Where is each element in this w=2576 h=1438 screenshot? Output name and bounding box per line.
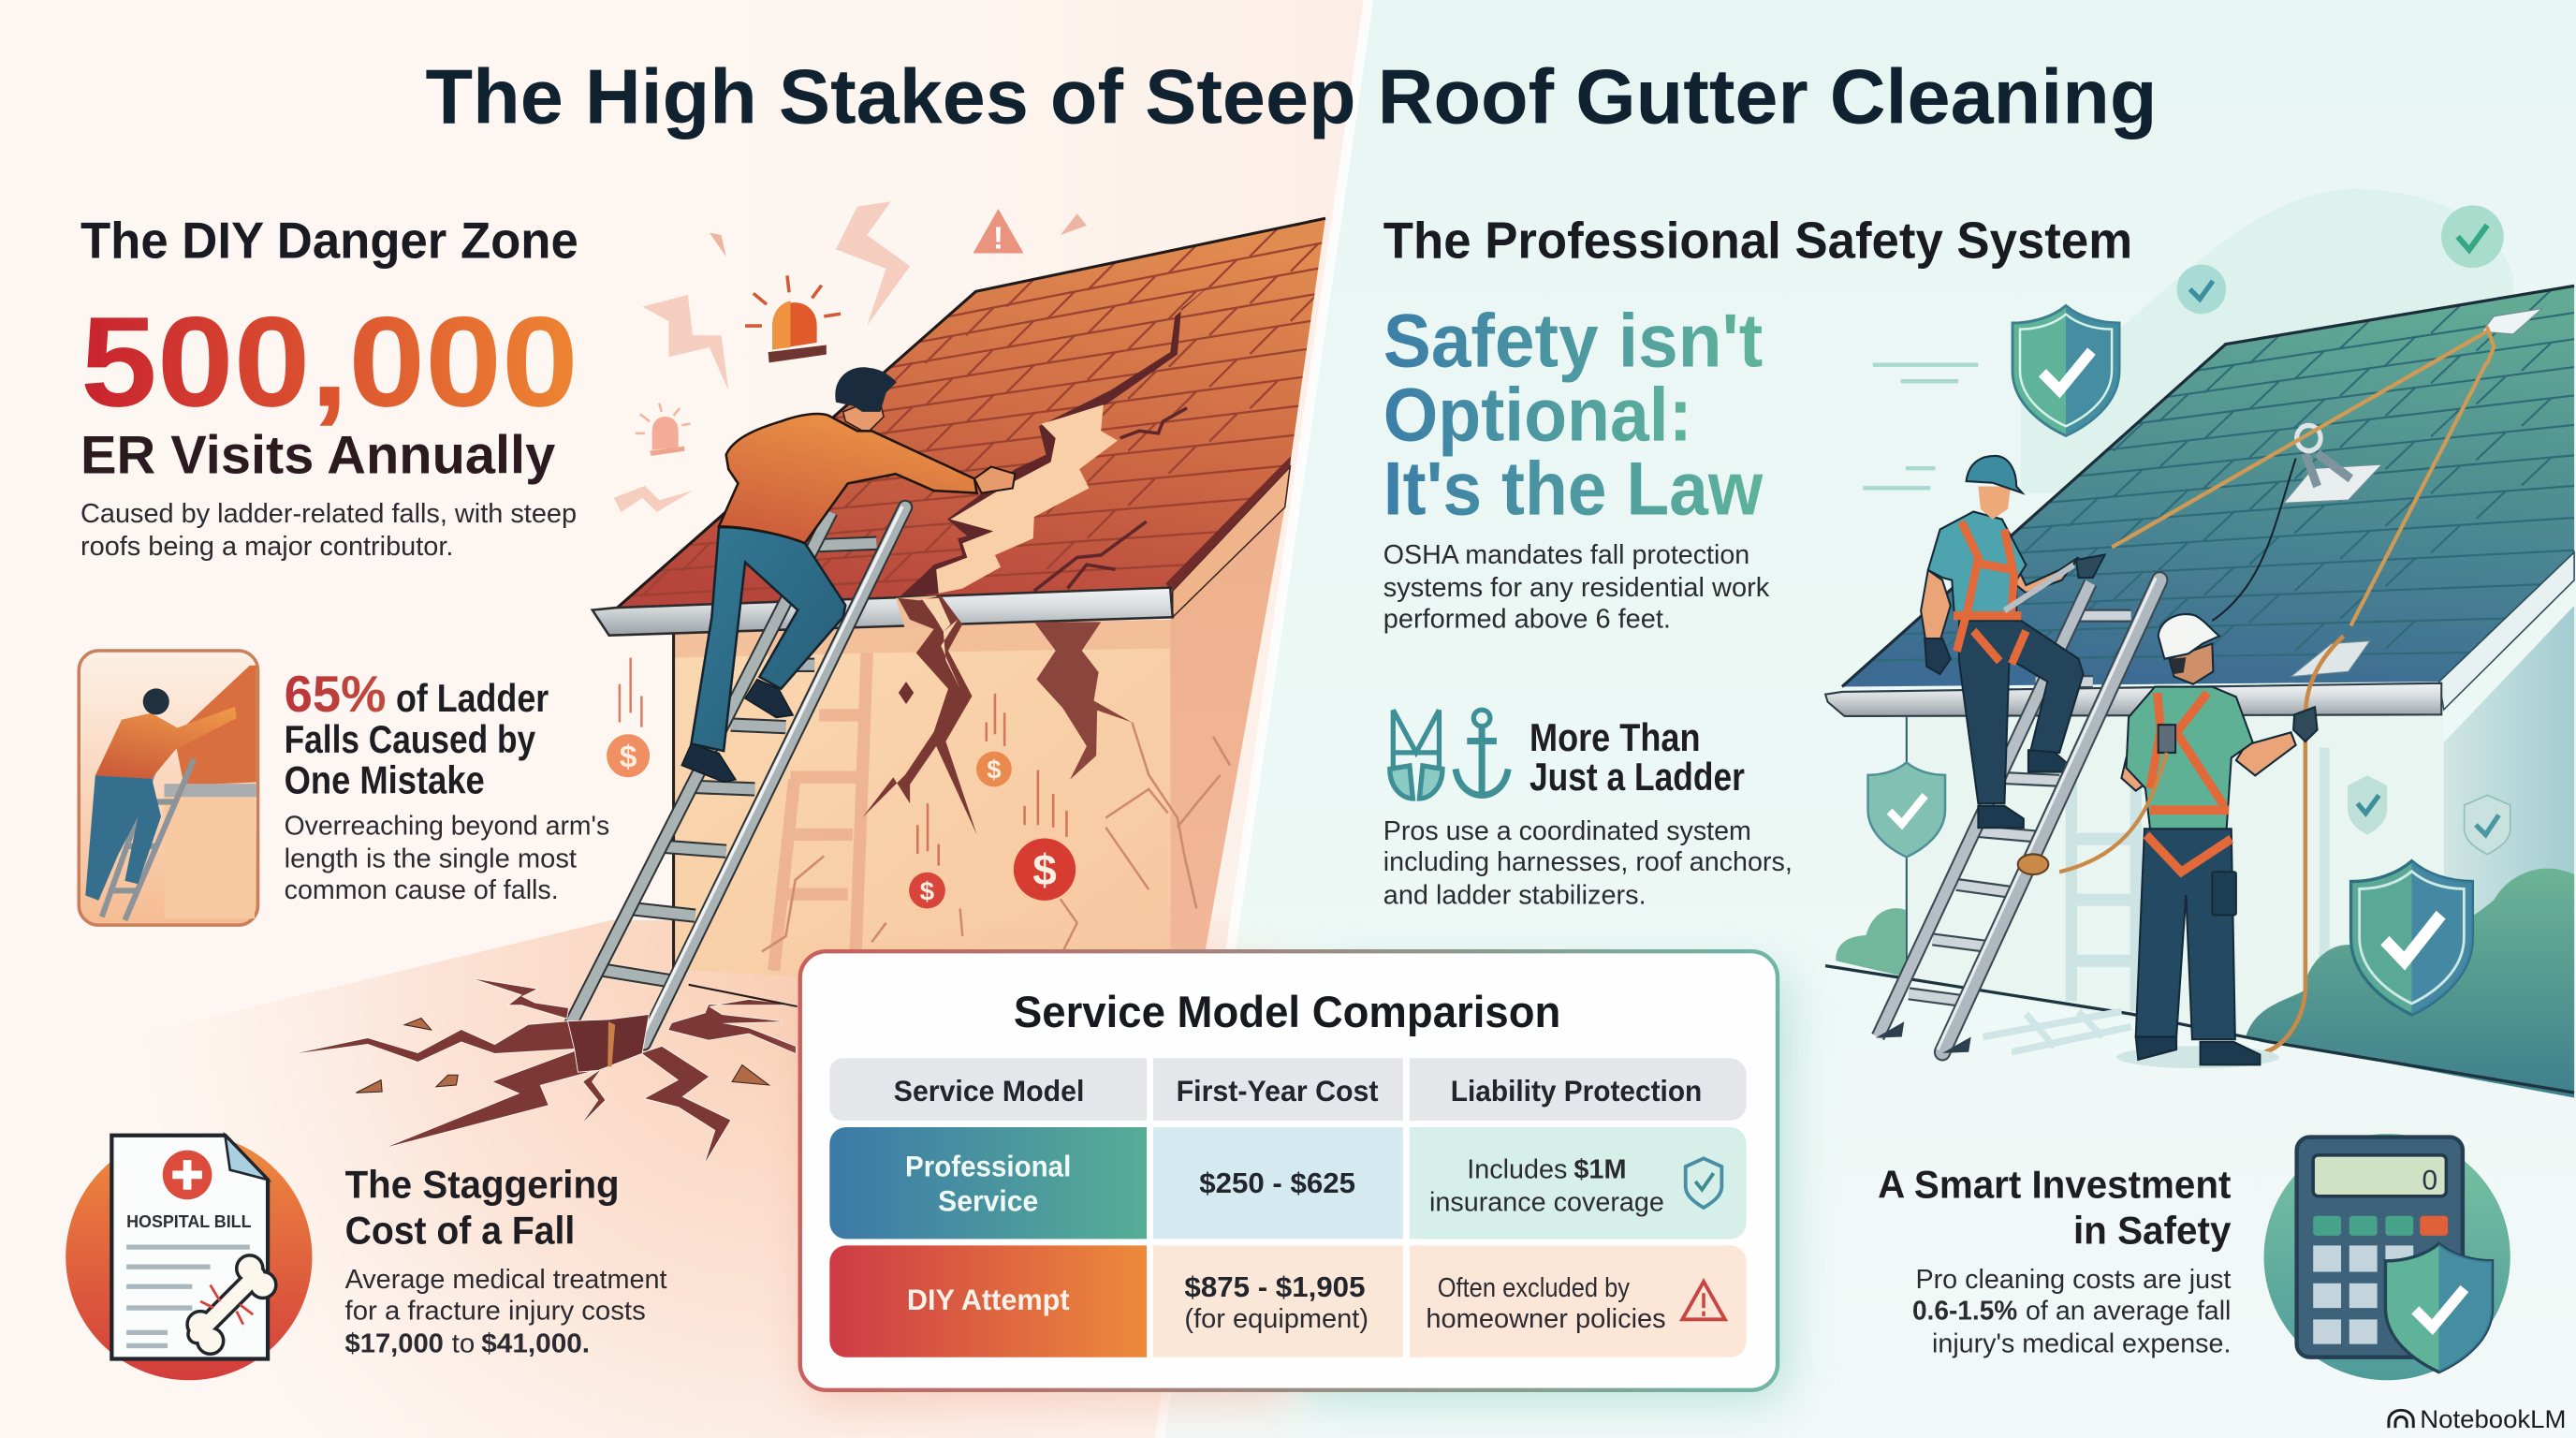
falling money — [607, 658, 1076, 908]
ladder back rail and rungs — [1878, 582, 2131, 1036]
falling money: $ — [1032, 845, 1057, 894]
icon: warning triangle — [1682, 1282, 1725, 1319]
callout heading: 65 percent: 65% — [285, 666, 386, 723]
harness straps — [2146, 693, 2232, 872]
callout body: ladder: Pros use a coordinated system — [1383, 816, 1751, 846]
ladder feet — [1876, 1021, 1971, 1053]
wall hairline cracks — [762, 723, 1230, 951]
header row: Liability Protection — [1451, 1074, 1702, 1108]
callout body: cost of a fall: Average medical treatment — [345, 1265, 667, 1295]
ghost ladder on wall — [2071, 778, 2136, 1011]
boots — [1978, 750, 2067, 828]
callout body: ladder: including harnesses, roof anchors, — [1383, 847, 1793, 877]
worker on ladder — [1921, 456, 2105, 828]
row: professional service — [829, 1127, 1747, 1239]
callout body: overreaching: Overreaching beyond arm's — [285, 812, 609, 842]
helmet — [1967, 456, 2022, 492]
lanyard to ladder — [2059, 753, 2167, 872]
row: DIY attempt — [829, 1245, 1747, 1357]
safety description: systems for any residential work — [1383, 573, 1770, 603]
row: professional service: insurance coverage — [1429, 1188, 1664, 1218]
thumbnail roof — [174, 666, 256, 785]
icon: calculator with shield: 0 — [2422, 1166, 2437, 1196]
stat label: ER Visits Annually — [80, 425, 555, 485]
gutter — [1825, 683, 2441, 716]
callout body: overreaching — [285, 812, 609, 905]
wall crack 2 — [1034, 622, 1132, 780]
shirt — [719, 414, 977, 543]
icon: pale shields on wall — [2348, 775, 2510, 855]
callout body: cost of a fall: to — [452, 1328, 475, 1358]
icon: shield large — [2351, 861, 2472, 1015]
boots — [2136, 1036, 2260, 1064]
soffit triangle — [1173, 467, 1290, 617]
falling money: $ — [620, 740, 637, 774]
title: The High Stakes of Steep Roof Gutter Cleaning — [426, 54, 2157, 140]
stat description — [80, 499, 577, 562]
section heading: DIY: The DIY Danger Zone — [80, 213, 578, 270]
icon: calculator with shield — [2264, 1134, 2510, 1380]
table title: Service Model Comparison — [1014, 988, 1560, 1037]
callout heading: 65 percent — [285, 666, 549, 802]
callout body: ladder — [1383, 816, 1793, 910]
callout heading: 65 percent: One Mistake — [285, 758, 485, 802]
thumbnail gutter — [165, 784, 256, 797]
row: DIY attempt: DIY Attempt — [907, 1283, 1070, 1316]
warning triangle — [973, 209, 1024, 253]
trousers — [1959, 621, 2084, 803]
hand — [2076, 555, 2105, 578]
icon: shield top — [2012, 305, 2119, 435]
row: professional service: Includes — [1467, 1154, 1567, 1184]
hair — [835, 367, 897, 412]
roof trim — [2439, 552, 2574, 710]
shoes — [681, 680, 793, 782]
callout body: smart investment: 0.6-1.5% — [1912, 1296, 2017, 1326]
wall outline — [671, 632, 677, 969]
roof shingles — [1872, 290, 2574, 660]
ladder front rail — [640, 506, 905, 1043]
callout body: overreaching: length is the single most — [285, 844, 577, 874]
callout heading: cost of a fall: The Staggering — [345, 1162, 620, 1206]
header row — [829, 1058, 1747, 1121]
safety headline: It's the Law — [1383, 447, 1763, 531]
thumbnail card: overreaching — [79, 651, 258, 925]
ladder shadow — [1983, 1011, 2131, 1052]
carabiner on ladder — [2018, 854, 2048, 874]
pants — [691, 527, 845, 751]
callout heading: 65 percent: of Ladder — [396, 676, 549, 720]
roof — [616, 218, 1325, 609]
siren — [772, 302, 817, 350]
callout body: smart investment — [1912, 1265, 2231, 1358]
header row: Service Model — [894, 1074, 1084, 1108]
row: professional service: $1M — [1573, 1154, 1627, 1184]
ghost ladder on wall — [774, 653, 867, 971]
background: professional side — [1160, 0, 2576, 1438]
side wall — [2444, 606, 2574, 1098]
section heading: professional: The Professional Safety System — [1383, 213, 2132, 270]
card — [800, 951, 1778, 1390]
head — [2169, 643, 2213, 684]
safety description — [1383, 540, 1770, 634]
callout heading: 65 percent: Falls Caused by — [285, 717, 536, 761]
left arm — [1921, 570, 1951, 641]
harness — [1954, 521, 2026, 664]
callout body: cost of a fall — [345, 1265, 667, 1358]
callout heading: ladder: Just a Ladder — [1530, 755, 1745, 799]
front wall — [1907, 714, 2444, 1072]
header row: First-Year Cost — [1177, 1074, 1379, 1108]
trousers — [2136, 829, 2235, 1039]
mid anchor post — [2305, 453, 2350, 486]
glove — [1925, 638, 1951, 674]
row: professional service: Service — [938, 1184, 1038, 1218]
hand — [974, 467, 1015, 493]
thumbnail pants — [85, 775, 161, 901]
roof outline — [616, 218, 1325, 609]
icons: warning siren and hazard marks: ! — [993, 221, 1003, 256]
thumbnail ladder — [102, 759, 194, 920]
stat description: roofs being a major contributor. — [80, 532, 453, 562]
row: professional service: $250 - $625 — [1199, 1167, 1355, 1199]
pale hill behind roof — [2021, 189, 2513, 493]
face — [1978, 486, 2011, 520]
gutter break — [896, 595, 950, 629]
small triangles — [710, 213, 1087, 257]
panel: service model comparison — [800, 951, 1791, 1405]
wall base line — [689, 985, 798, 1006]
thumbnail shirt — [95, 707, 237, 779]
callout body: overreaching: common cause of falls. — [285, 875, 559, 905]
man on ladder — [681, 367, 1015, 782]
callout body: cost of a fall: for a fracture injury costs — [345, 1296, 646, 1326]
ground pit wall — [607, 1021, 615, 1066]
lower rope — [2264, 636, 2344, 1052]
callout heading: cost of a fall — [345, 1162, 620, 1253]
roof — [1842, 286, 2574, 687]
callout body: smart investment: injury's medical expense. — [1932, 1328, 2231, 1358]
callout heading: ladder — [1530, 715, 1745, 799]
callout body: cost of a fall: $41,000. — [481, 1328, 590, 1358]
row: DIY attempt: homeowner policies — [1426, 1304, 1666, 1334]
icon: liability shield — [1686, 1158, 1721, 1208]
icon: hospital bill: HOSPITAL BILL — [126, 1211, 252, 1231]
top anchor plate — [2482, 309, 2541, 334]
left arm — [2121, 757, 2146, 791]
lanyard — [2004, 565, 2073, 610]
shadow — [2116, 1046, 2279, 1068]
shirt — [1928, 512, 2026, 616]
safety description: OSHA mandates fall protection — [1383, 540, 1749, 570]
roof side cracks — [1034, 408, 1187, 591]
callout body: cost of a fall: $17,000 — [345, 1328, 444, 1358]
roof crack inner — [936, 404, 1118, 594]
safety headline: Safety isn't — [1383, 299, 1763, 383]
lightning bolts — [614, 201, 910, 512]
helmet — [2159, 614, 2219, 659]
falling money: $ — [987, 756, 1002, 785]
roof crack dark — [898, 281, 1216, 598]
neck — [843, 398, 884, 433]
watermark: NotebookLM: NotebookLM — [2420, 1404, 2566, 1433]
wall base line — [1825, 966, 2574, 1093]
roof shingles — [631, 228, 1325, 597]
bone — [198, 1275, 256, 1334]
shirt — [2127, 687, 2253, 829]
gutter — [593, 588, 1173, 636]
callout body: smart investment: Pro cleaning costs are just — [1915, 1265, 2231, 1295]
icon: harness and anchor — [1390, 710, 1508, 799]
roof outline — [1842, 286, 2574, 687]
icon: check badges — [1863, 205, 2504, 488]
mid anchor plate — [2284, 464, 2381, 503]
wall crack 1 — [862, 595, 977, 834]
downspout — [2314, 748, 2334, 971]
roof fascia — [1165, 456, 1291, 591]
mid anchor ring — [2297, 425, 2320, 451]
icon: hospital bill — [66, 1134, 312, 1380]
wall crack 1 inner — [922, 598, 960, 689]
callout heading: smart investment: A Smart Investment — [1878, 1162, 2231, 1206]
illustration: DIY roof and cracked house — [568, 218, 1325, 1043]
stat description: Caused by ladder-related falls, with steep — [80, 499, 577, 529]
safety description: performed above 6 feet. — [1383, 604, 1671, 634]
row: professional service: Professional — [905, 1150, 1071, 1183]
house front wall — [674, 620, 1170, 999]
bushes — [2246, 869, 2574, 1098]
ropes — [2112, 327, 2494, 625]
right arm — [2016, 557, 2079, 593]
ground debris — [356, 1019, 768, 1093]
lower anchor plate — [2291, 641, 2370, 677]
house side wall — [1170, 507, 1285, 999]
thumbnail wall — [165, 797, 255, 918]
background: diagonal seam — [1160, 0, 1368, 1438]
diamond debris — [899, 682, 914, 704]
row: DIY attempt: $875 - $1,905 — [1184, 1270, 1365, 1303]
soffit shading — [674, 620, 1170, 658]
hair — [2170, 657, 2186, 674]
callout body: ladder: and ladder stabilizers. — [1383, 880, 1647, 910]
falling money: $ — [920, 876, 934, 905]
safety headline — [1383, 299, 1763, 531]
background: ground on DIY side — [0, 920, 1249, 1438]
icon: shield lower left — [1868, 762, 1945, 857]
right arm — [2236, 732, 2296, 775]
card glow — [805, 970, 1298, 1405]
wall left edge — [1905, 717, 1909, 980]
illustration: ground cracks — [298, 979, 798, 1162]
callout heading: smart investment: in Safety — [2073, 1209, 2232, 1253]
callout heading: smart investment — [1878, 1162, 2232, 1253]
thumbnail head — [143, 688, 169, 714]
black line — [2212, 459, 2296, 621]
icons: warning siren and hazard marks — [614, 201, 1087, 512]
row: DIY attempt: (for equipment) — [1184, 1304, 1368, 1334]
worker on ground — [2116, 614, 2318, 1068]
shield on calculator — [2385, 1244, 2492, 1372]
ladder back rail and rungs — [568, 512, 876, 1029]
small siren — [652, 417, 679, 450]
illustration: professional roof and workers — [1825, 286, 2574, 1098]
ladder front rail — [1938, 578, 2159, 1052]
background: DIY side — [0, 0, 1380, 1438]
glove — [2293, 707, 2318, 741]
safety headline: Optional: — [1383, 373, 1692, 457]
row: DIY attempt: Often excluded by — [1438, 1273, 1631, 1303]
callout heading: ladder: More Than — [1530, 715, 1701, 759]
callout heading: cost of a fall: Cost of a Fall — [345, 1209, 575, 1253]
callout body: smart investment: of an average fall — [2026, 1296, 2231, 1326]
pocket — [2212, 872, 2236, 915]
big stat: 500,000 — [80, 291, 578, 434]
dorsal device — [2159, 725, 2175, 753]
